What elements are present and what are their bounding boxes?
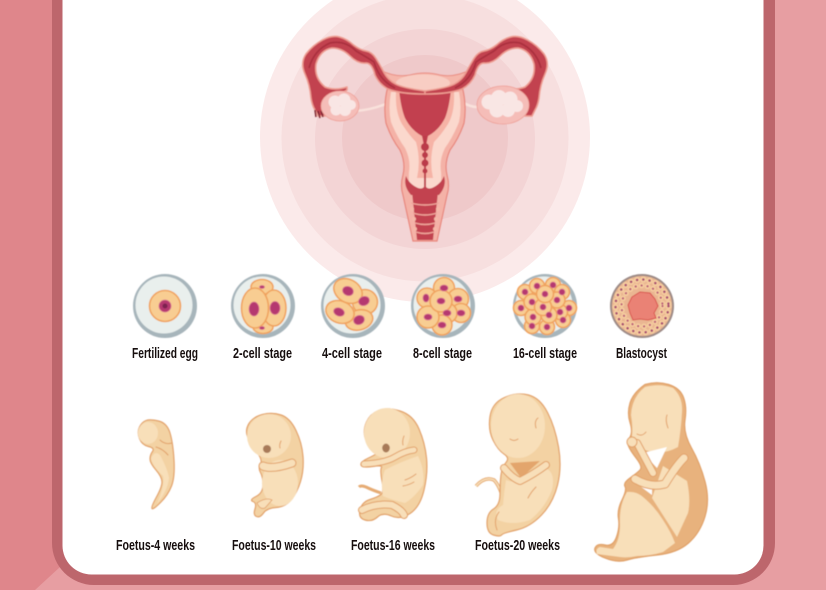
label: fertilized egg: Fertilized egg [132,345,198,362]
chest shadow [510,461,540,478]
thigh and shin [596,492,675,557]
arm gap [636,483,652,495]
label: 2-cell stage: 2-cell stage [233,345,292,362]
lower arm [635,458,684,485]
cell: 2-cell stage [231,274,295,338]
uterus muscle wall [385,86,465,241]
cell: fertilized egg [133,274,197,338]
fundus highlight [396,74,450,92]
left fallopian tube [303,36,425,118]
foetus: 10 weeks [247,413,303,517]
uterine cavity [399,90,451,146]
vaginal canal with rugae [405,176,445,240]
concentric glow circles [260,0,590,302]
foetus: 4 weeks [138,420,174,509]
row: early cell stages [132,274,674,362]
label: 8-cell stage: 8-cell stage [413,345,472,362]
label: foetus 4 weeks: Foetus-4 weeks [116,537,195,554]
row: foetus stages [116,383,708,561]
label: 4-cell stage: 4-cell stage [322,345,382,362]
label: foetus 16 weeks: Foetus-16 weeks [351,537,435,554]
uterus inner lining [390,92,460,194]
left ovary [321,91,359,121]
foetus: full term [595,383,708,561]
chin gap [643,447,667,468]
right ligament [462,102,480,107]
label: 16-cell stage: 16-cell stage [513,345,577,362]
foetus: 20 weeks [476,394,560,536]
label: blastocyst: Blastocyst [616,345,667,362]
cell: 16-cell stage [513,274,577,338]
fundus [378,69,472,92]
raised arm [637,443,653,473]
label: foetus 20 weeks: Foetus-20 weeks [475,537,560,554]
cell: 8-cell stage [411,274,475,338]
left ligament [355,103,388,111]
diagram: uterus and ovaries [303,36,547,241]
label: foetus 10 weeks: Foetus-10 weeks [232,537,316,554]
cervical canal [421,136,429,192]
foetus: 16 weeks [359,408,427,521]
cell: blastocyst [610,274,674,338]
right ovary [477,86,529,124]
lining fold [396,92,454,178]
torso [652,466,689,537]
right fallopian tube [425,36,547,116]
head [631,385,682,452]
cell: 4-cell stage [321,274,385,338]
